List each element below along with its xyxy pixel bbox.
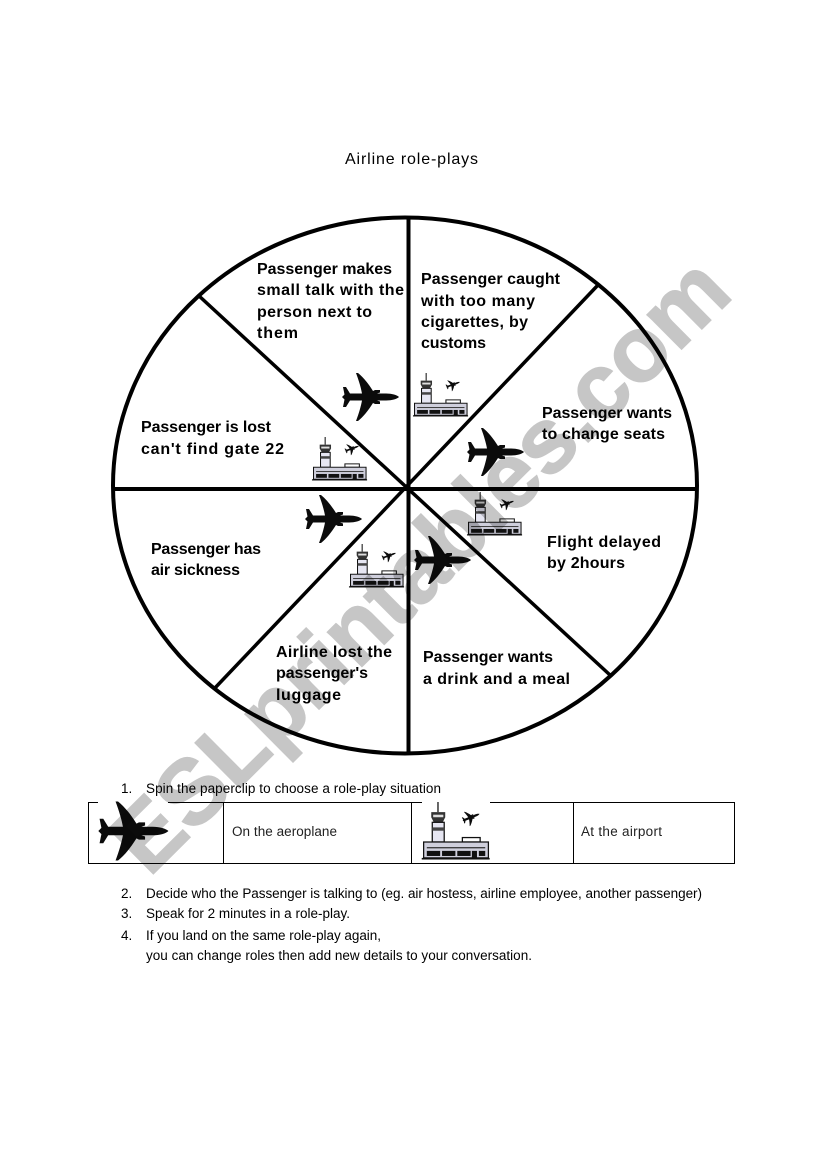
instructions 2 to 4: Speak for 2 minutes in a role-play.	[146, 906, 350, 921]
segment: small talk	[257, 261, 404, 342]
segment: lost gate	[141, 419, 284, 458]
segment: air sickness: air sickness	[151, 562, 240, 579]
icon: aeroplane, change seats	[467, 428, 524, 476]
instructions 2 to 4: you can change roles then add new details to your conversation.	[146, 948, 532, 963]
icon: aeroplane, drink and meal	[414, 536, 471, 584]
segment: change seats: Passenger wants	[542, 405, 672, 422]
instructions 2 to 4: 2.	[121, 886, 132, 901]
segment: lost luggage	[276, 644, 392, 704]
icon: aeroplane, small talk	[342, 373, 399, 421]
segment: lost luggage: passenger's	[276, 665, 368, 682]
wheel outline and dividers	[113, 217, 697, 754]
segment: drink and meal: a drink and a meal	[423, 671, 570, 688]
instructions 2 to 4	[121, 886, 702, 963]
segment: lost gate: Passenger is lost	[141, 419, 272, 436]
instructions 2 to 4: If you land on the same role-play again,	[146, 928, 381, 943]
label: on the aeroplane: On the aeroplane	[232, 824, 337, 839]
segment: drink and meal: Passenger wants	[423, 649, 553, 666]
segment: flight delayed: by 2hours	[547, 555, 625, 572]
segment: flight delayed	[547, 534, 661, 572]
instruction 1: 1.	[121, 781, 132, 796]
panel: icon legend table	[88, 800, 734, 864]
segment: small talk: them	[257, 325, 298, 342]
icon: airport legend	[422, 800, 490, 860]
segment: cigarettes: Passenger caught	[421, 271, 561, 288]
segment: small talk: small talk with the	[257, 282, 404, 299]
segment: change seats	[542, 405, 672, 443]
icon: airport, lost luggage	[349, 544, 404, 587]
segment: small talk: Passenger makes	[257, 261, 392, 278]
watermark: ESLprintables.com	[91, 238, 749, 892]
instructions 2 to 4: Decide who the Passenger is talking to (eg. air hostess, airline employee, another passenger)	[146, 886, 702, 901]
segment: lost gate: can't find gate 22	[141, 441, 284, 458]
segment: cigarettes: cigarettes, by	[421, 314, 528, 331]
segment: change seats: to change seats	[542, 426, 665, 443]
segment: flight delayed: Flight delayed	[547, 534, 661, 551]
icon: aeroplane legend	[98, 800, 168, 861]
title: Airline role-plays	[345, 151, 478, 168]
instructions 2 to 4: 3.	[121, 906, 132, 921]
segment: cigarettes	[420, 271, 561, 352]
segment: air sickness: Passenger has	[151, 541, 261, 558]
panel: role-play spinner wheel	[113, 217, 697, 754]
segment: drink and meal	[423, 649, 570, 688]
label: at the airport: At the airport	[581, 824, 662, 839]
icon: airport, cigarettes	[413, 373, 468, 416]
instructions 2 to 4: 4.	[121, 928, 132, 943]
segment: lost luggage: Airline lost the	[276, 644, 392, 661]
segment: air sickness	[151, 541, 261, 579]
table borders	[88, 802, 734, 864]
segment: small talk: person next to	[257, 304, 372, 321]
segment: cigarettes: customs	[421, 335, 486, 352]
icon: aeroplane, air sickness	[305, 495, 362, 543]
segment: cigarettes: with too many	[420, 293, 535, 310]
icon: airport, flight delayed	[467, 492, 522, 535]
icon: airport, lost gate	[312, 437, 367, 480]
segment: lost luggage: luggage	[276, 687, 341, 704]
instruction 1: Spin the paperclip to choose a role-play situation	[146, 781, 441, 796]
